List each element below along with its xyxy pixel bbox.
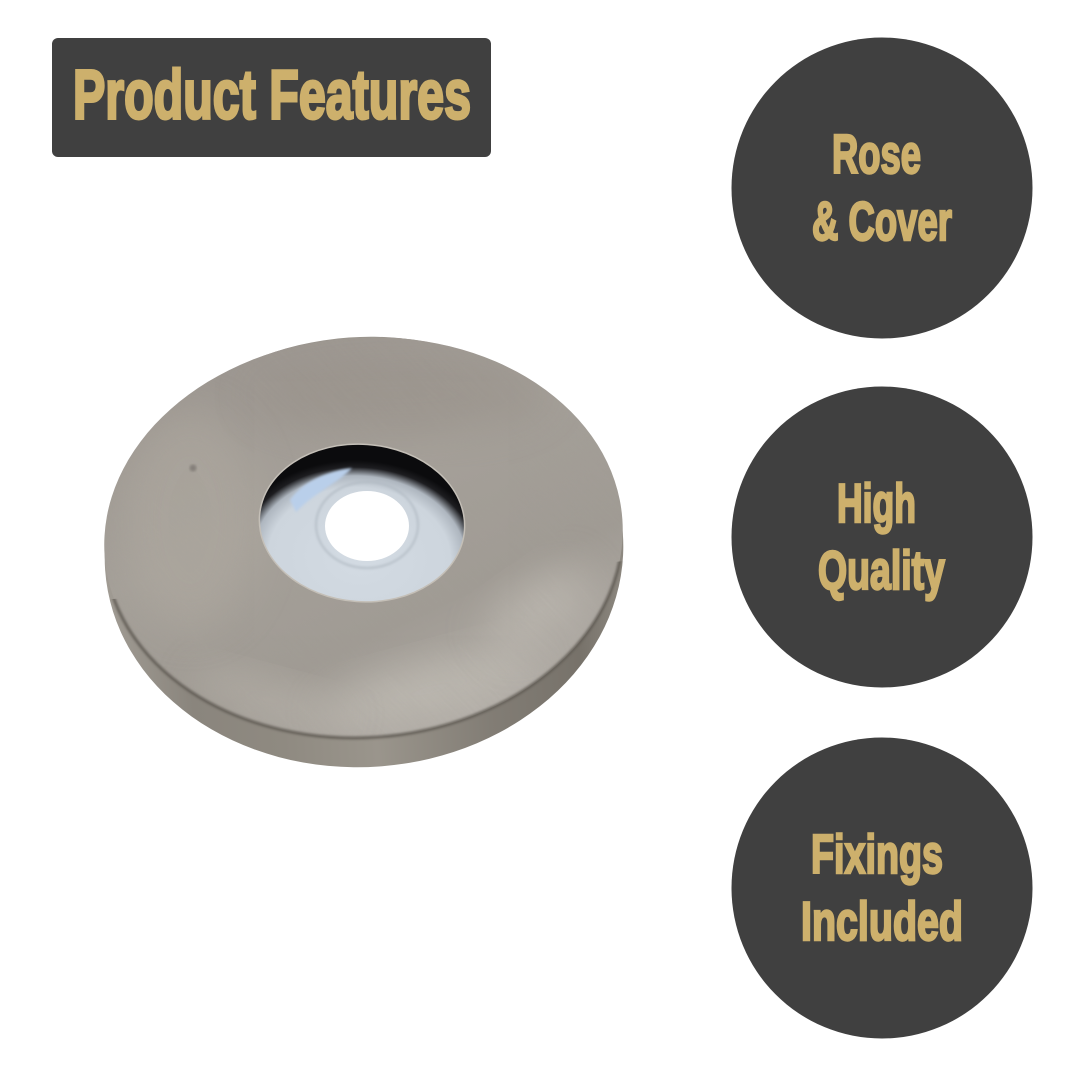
washer seen through centre hole <box>258 443 466 603</box>
washer centre hole <box>325 491 409 561</box>
feature badge: Rose & Cover: Rose <box>832 124 921 185</box>
title: Product Features: Product Features <box>73 56 471 134</box>
product photo: brushed metal rose cover <box>104 336 624 768</box>
feature badge: High Quality: Quality <box>818 540 945 601</box>
feature badge: Rose & Cover: & Cover <box>812 191 952 252</box>
feature badge: Fixings Included: Fixings <box>811 824 943 885</box>
feature badge: Fixings Included: Included <box>801 891 963 952</box>
feature badge: High Quality <box>732 386 1032 688</box>
title: Product Features <box>52 38 491 157</box>
rim of cover <box>90 319 638 785</box>
feature badge: Fixings Included <box>732 738 1032 1038</box>
feature badge: High Quality: High <box>837 473 916 534</box>
top face of cover <box>104 337 623 738</box>
crease between face and rim <box>112 562 623 740</box>
feature badge: Rose & Cover <box>732 38 1032 338</box>
